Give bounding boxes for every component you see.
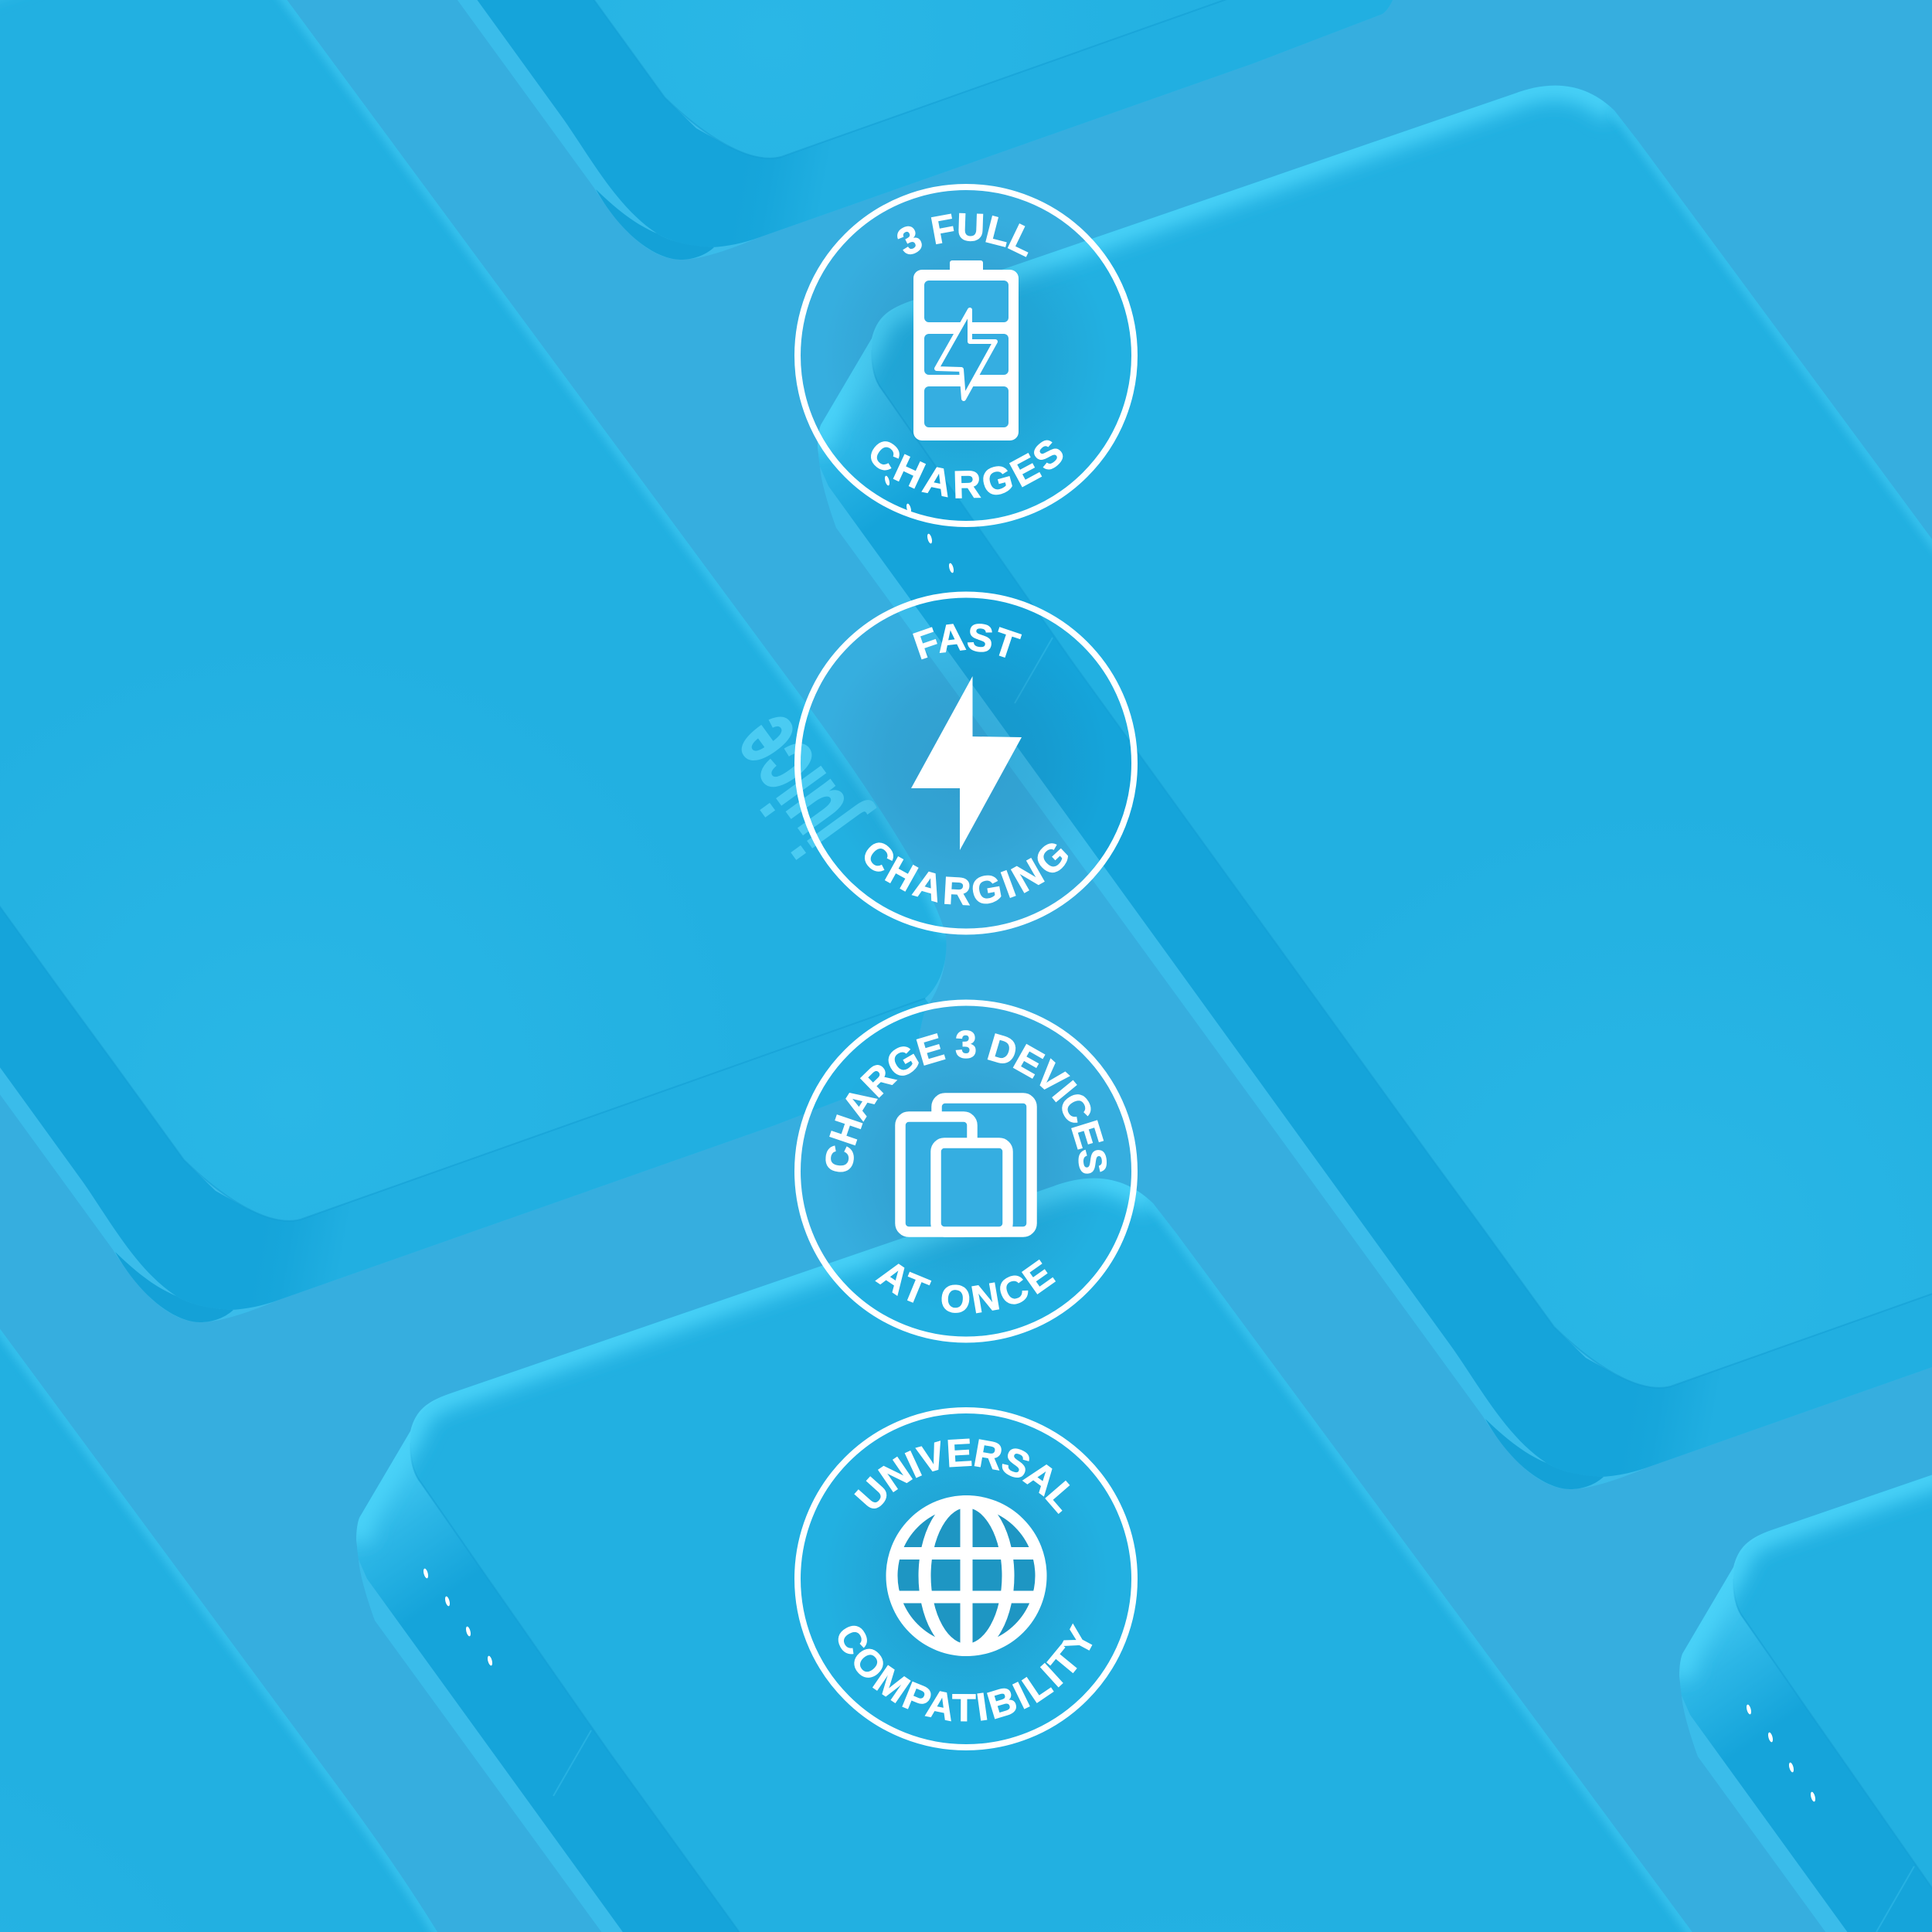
badge: universal compatibility (794, 1407, 1138, 1750)
badge: charge 3 devices at once (794, 1000, 1138, 1343)
icon: globe (892, 1499, 1041, 1652)
badge: 3 full charges (794, 184, 1138, 527)
label: AT ONCE: AT ONCE (875, 1260, 1056, 1314)
label: 3 FULL: 3 FULL (897, 213, 1029, 257)
power bank: bottom left (0, 1012, 485, 1932)
ring (798, 1003, 1134, 1340)
label: COMPATIBILITY: COMPATIBILITY (838, 1623, 1093, 1722)
icon: battery with bolt (913, 260, 1019, 440)
label: FAST: FAST (913, 624, 1022, 660)
label: CHARGES: CHARGES (871, 440, 1063, 498)
icon: three devices (900, 1098, 1032, 1232)
power bank: bottom centre (356, 1179, 1855, 1932)
power bank: top (0, 0, 1427, 260)
icon: lightning bolt (911, 676, 1022, 850)
power bank: right large (818, 86, 1932, 1489)
label: UNIVERSAL: UNIVERSAL (854, 1439, 1070, 1514)
power bank: left large (0, 0, 947, 1322)
ring (798, 187, 1134, 524)
label: CHARGE 3 DEVICES: CHARGE 3 DEVICES (825, 1030, 1107, 1174)
ring (798, 1410, 1134, 1747)
ring (798, 595, 1134, 932)
badge: fast charging (794, 592, 1138, 935)
label: CHARGING: CHARGING (864, 842, 1068, 906)
power bank: bottom right (1679, 1315, 1932, 1932)
brand logo on device: juice (706, 697, 877, 874)
